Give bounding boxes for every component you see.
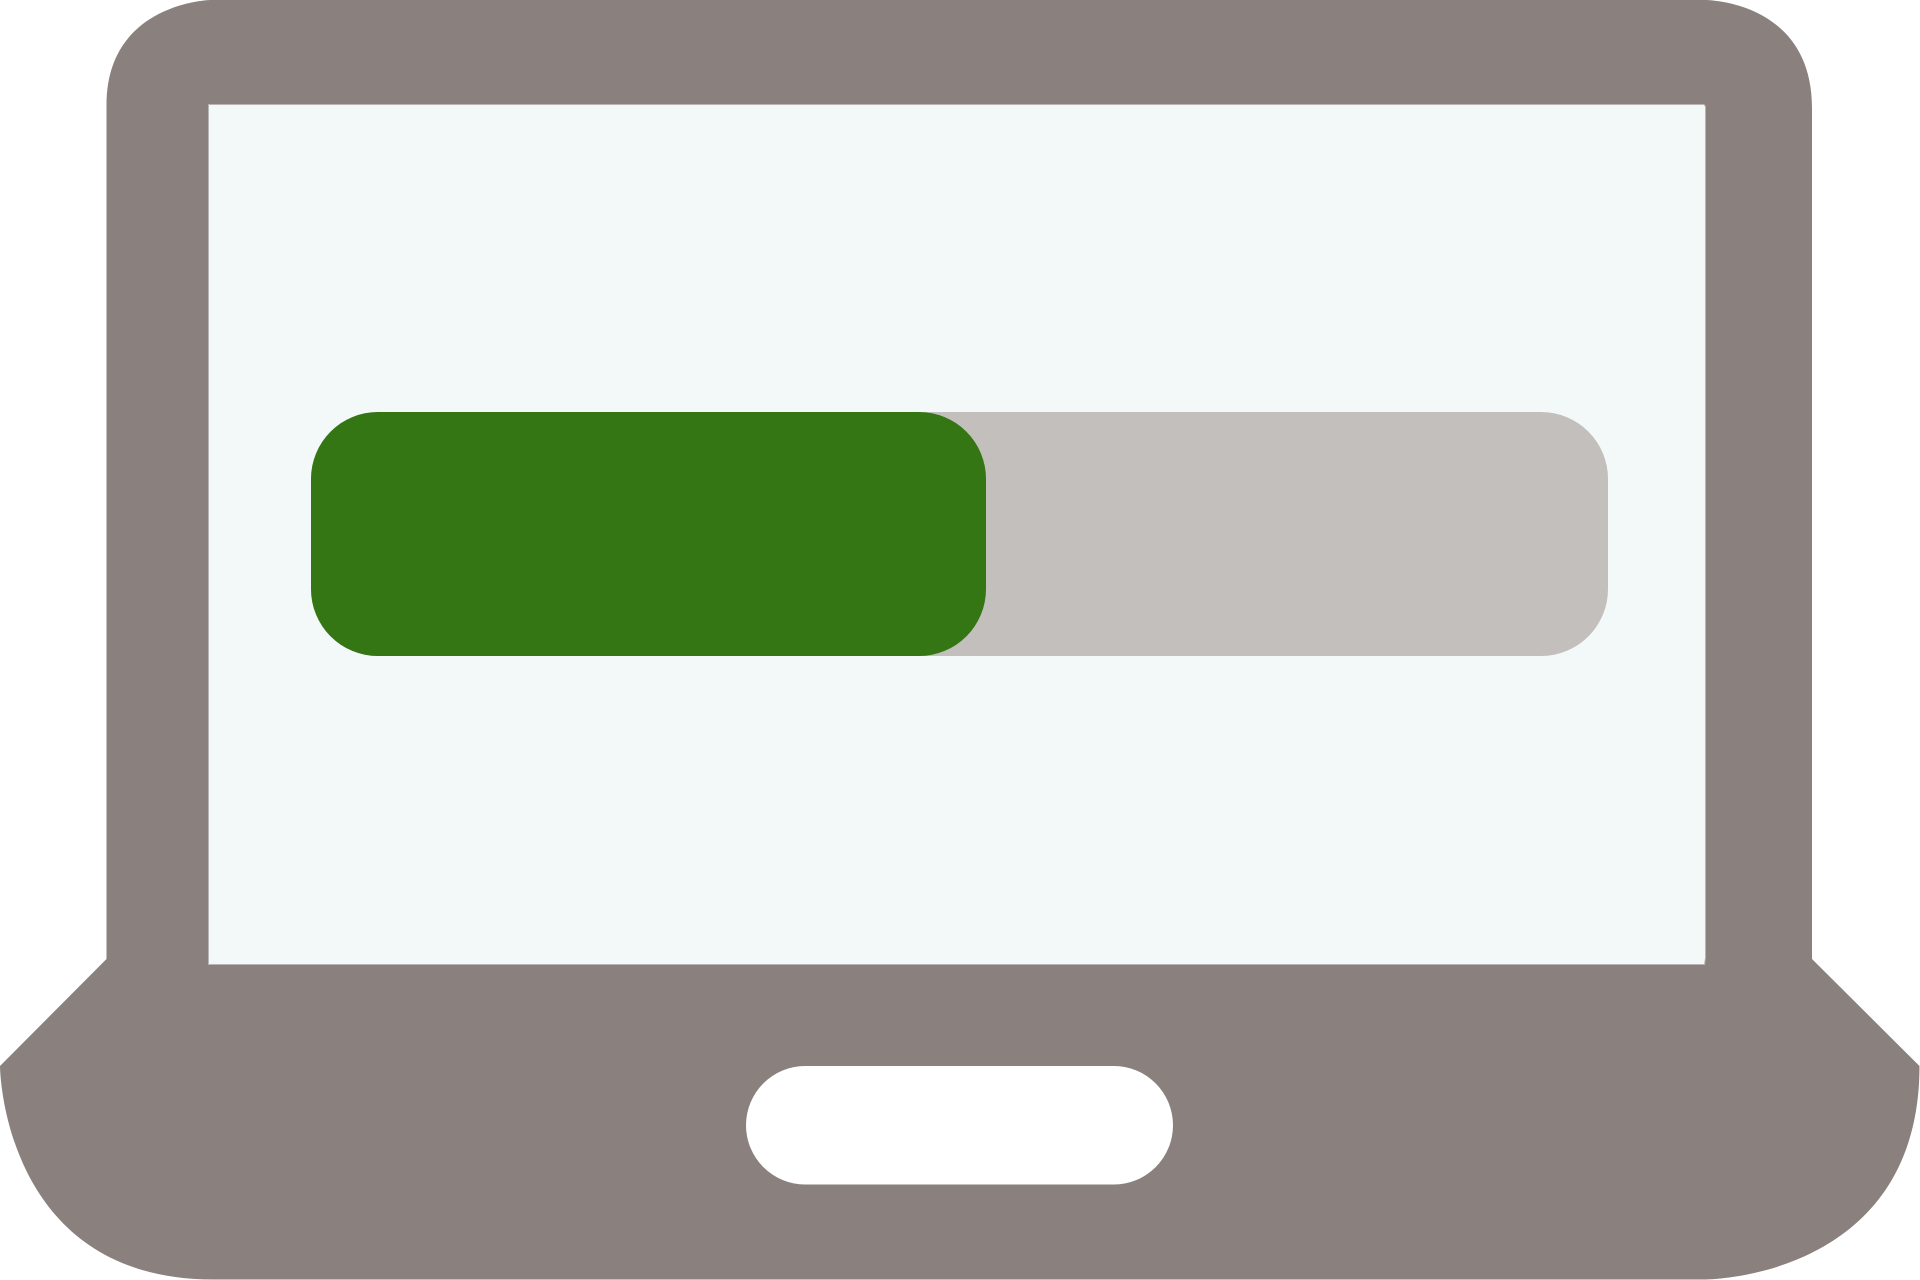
trackpad (746, 1066, 1173, 1184)
laptop screen (208, 104, 1706, 964)
progress fill (311, 412, 986, 656)
progress bar (311, 412, 1608, 656)
progress track (311, 412, 1608, 656)
